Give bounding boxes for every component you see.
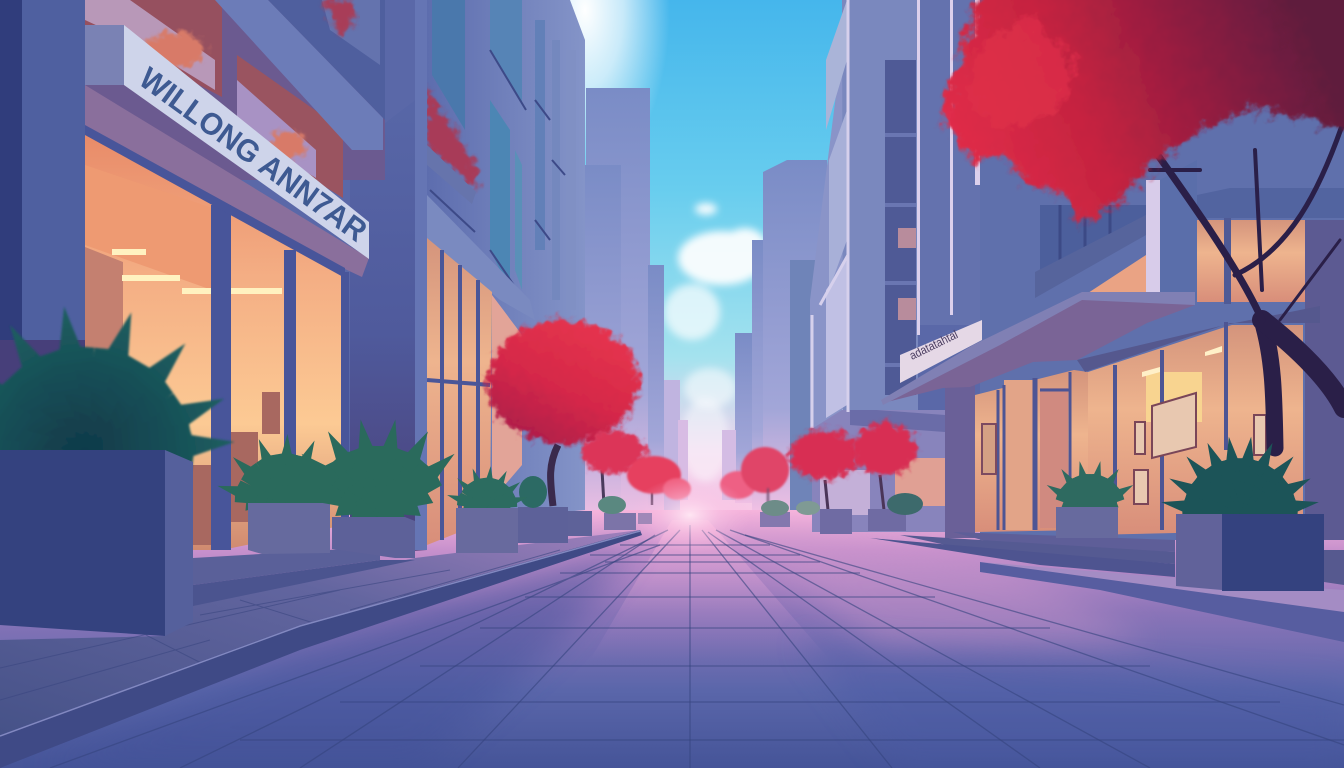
upper right mullion (1224, 218, 1231, 304)
column lit edge (415, 0, 427, 550)
right building (810, 0, 1344, 585)
upper glass strips (432, 0, 576, 310)
tower warm glints (898, 228, 916, 320)
upper left panel (85, 0, 385, 180)
light pillar (1146, 180, 1160, 292)
left sidewalk joints (0, 550, 560, 700)
upper window 1 (85, 0, 222, 97)
upper wall behind balcony (268, 0, 385, 120)
flower box ledge (427, 145, 476, 204)
right end wall (1305, 220, 1344, 540)
flower box (427, 85, 478, 192)
entrance glass (975, 370, 1088, 532)
left sidewalk (0, 530, 640, 735)
upper window 2 (237, 55, 343, 198)
planter (0, 450, 193, 636)
plant: left row 2 (285, 415, 471, 558)
tower window floors (885, 135, 916, 365)
far facade (415, 0, 585, 540)
lower warm windows (427, 238, 492, 545)
plant: left row 3 (444, 465, 530, 553)
awning (881, 292, 1195, 405)
entry step lower (193, 560, 415, 606)
glass tower edge (810, 0, 850, 430)
sky (560, 0, 860, 540)
shop window (1088, 325, 1303, 535)
planters: distant right (760, 493, 923, 534)
window blossom (270, 130, 306, 160)
main block (980, 100, 1344, 540)
interior furniture (190, 392, 280, 545)
lit strips (917, 0, 980, 335)
entry frames (998, 372, 1070, 530)
entry steps left (193, 547, 380, 585)
plant: big left (0, 300, 239, 636)
shop light (1146, 372, 1202, 422)
tree: far left (627, 456, 681, 505)
upper glass band (1040, 205, 1146, 272)
planters: distant left (518, 476, 652, 543)
pink light on right of road (740, 535, 1150, 650)
tree: right pair (789, 422, 916, 510)
column lower wall (0, 340, 85, 455)
left curb (0, 530, 642, 768)
tower window band (885, 60, 916, 395)
paving lines (50, 525, 1344, 768)
planter (248, 503, 330, 554)
side pillar (1160, 160, 1197, 300)
plant: entrance right (1040, 458, 1140, 538)
podium ledge (850, 408, 945, 432)
upper window 1 reflection (85, 0, 215, 90)
lower warm windows far (492, 295, 522, 500)
shadow on left of road (40, 540, 640, 768)
podium warm window (895, 458, 945, 506)
entrance column (945, 385, 975, 538)
planter (1056, 507, 1118, 538)
lower podium (812, 410, 952, 532)
overhang (215, 0, 383, 150)
sign underside (85, 85, 369, 277)
interior wall cabinet (85, 247, 123, 350)
artworks (1134, 393, 1266, 504)
horizon glow (630, 477, 750, 553)
small flower box top (322, 0, 355, 36)
picture frame left (982, 424, 996, 474)
right curb (980, 562, 1344, 642)
tree: farthest left (663, 478, 691, 500)
plant: front right (1158, 434, 1324, 591)
interior ceiling (85, 165, 212, 290)
planter (456, 508, 518, 553)
mid ledge (427, 195, 535, 320)
planter (1176, 514, 1324, 591)
window blossom upper (145, 32, 205, 68)
storefront (85, 130, 345, 550)
window frames (85, 125, 349, 550)
distant towers right (722, 160, 828, 515)
sky glow top left (500, 0, 670, 180)
storefront header band (1077, 306, 1320, 372)
distant towers left (583, 88, 688, 520)
left building (0, 0, 585, 606)
left curb highlights (0, 531, 640, 736)
sign text: adatatahtal (907, 327, 960, 363)
glass band mullions (1060, 205, 1110, 262)
window mullions (427, 250, 490, 540)
far right steps (1324, 550, 1344, 585)
upper right windows (1197, 220, 1305, 302)
band sill (1035, 215, 1146, 298)
column strip (918, 0, 980, 325)
sign (124, 25, 374, 259)
podium glass (820, 470, 870, 515)
crown: large right tree (940, 0, 1344, 222)
dark edge column (0, 0, 22, 340)
ground (0, 510, 1344, 768)
tree: far right cluster (720, 447, 789, 505)
tower left windows (826, 0, 847, 418)
plant: left row 1 (213, 432, 357, 554)
front column (22, 0, 85, 350)
shop frames (1115, 322, 1226, 532)
column (350, 0, 427, 555)
ceiling lights (112, 249, 282, 294)
bright ceiling lamps (1142, 346, 1222, 377)
right steps (870, 532, 1175, 577)
right sidewalk (980, 562, 1344, 615)
building sign (900, 320, 982, 383)
entry doors (1004, 380, 1068, 530)
upper window 2 reflection (237, 80, 316, 178)
floor ledges (430, 50, 565, 300)
warm window above awning (1088, 255, 1146, 293)
upper right header (1197, 188, 1344, 218)
tree: large left (487, 320, 639, 506)
tree: mid left (582, 430, 646, 505)
planter (332, 517, 415, 558)
balcony (322, 0, 380, 65)
sign text: WILLONG ANN7AR (133, 60, 374, 249)
sign return (85, 25, 124, 85)
tower face (842, 0, 918, 410)
tower lit trim (812, 0, 848, 428)
shadow band on road (800, 640, 1344, 768)
trunk: large right tree (1140, 120, 1344, 448)
road light streak (590, 520, 830, 660)
clouds (664, 203, 767, 482)
